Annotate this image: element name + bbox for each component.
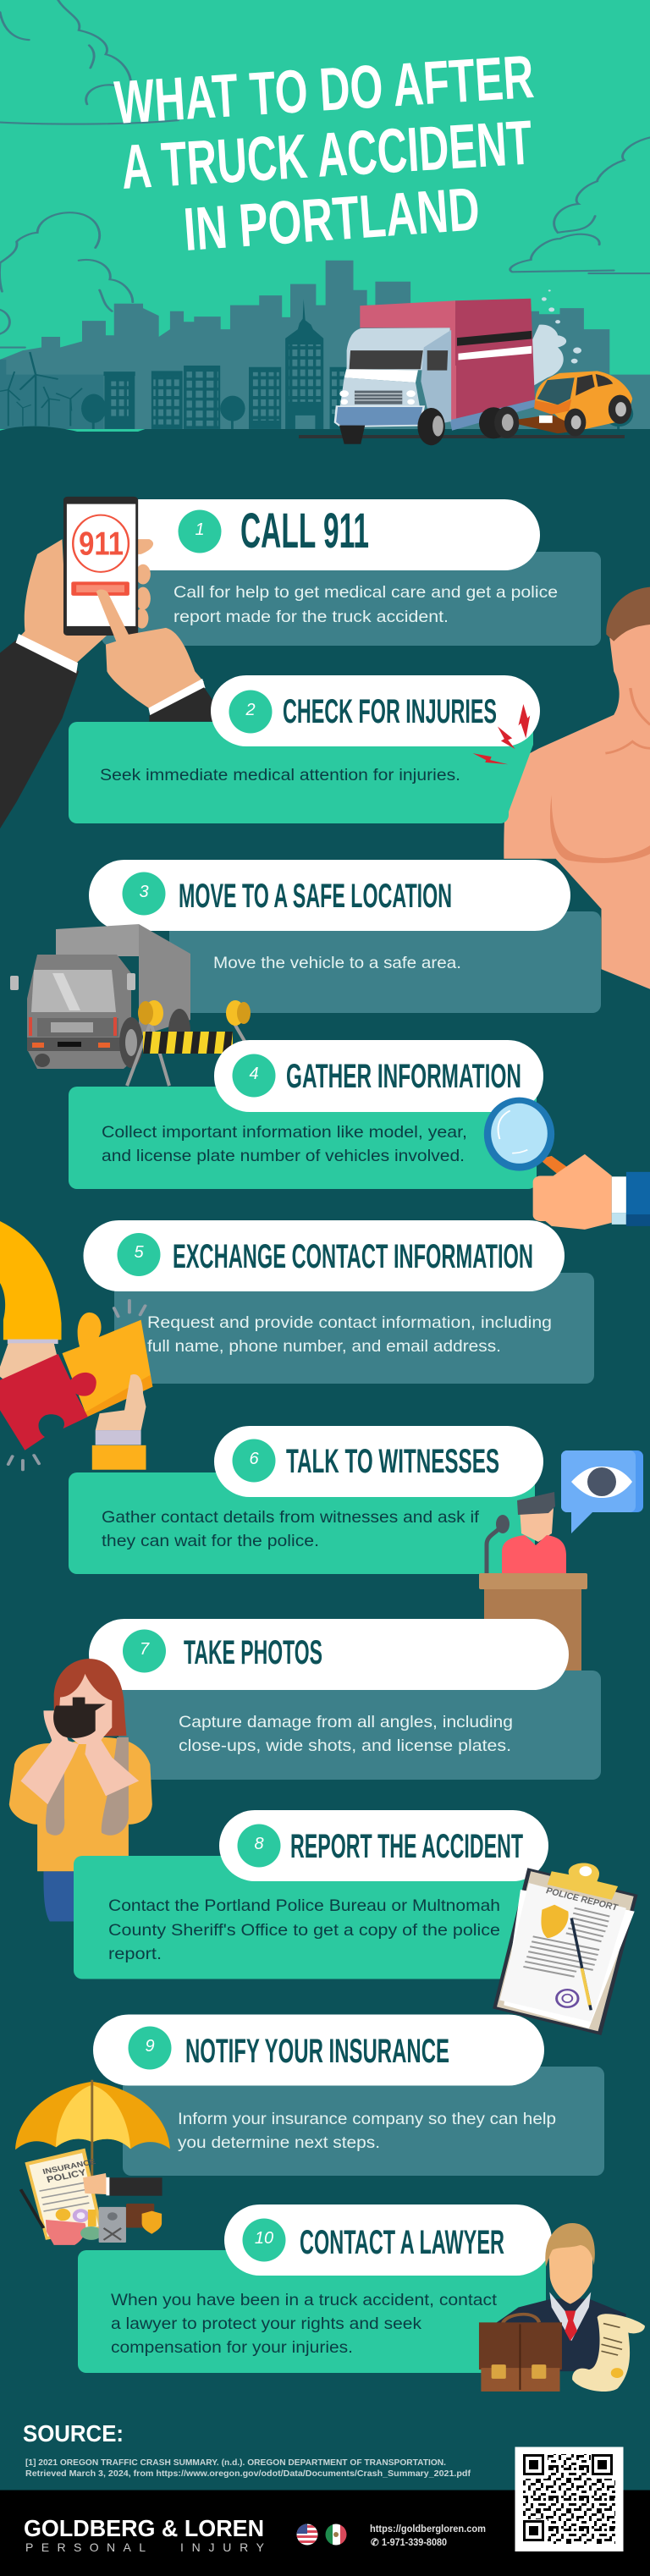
panel text box: [169, 911, 601, 1013]
icon: pain bolts: [473, 704, 530, 764]
umbrella: [15, 2082, 170, 2149]
logo: INJURY: [180, 2540, 265, 2554]
heading: NOTIFY YOUR INSURANCE: [185, 2033, 449, 2070]
icon: photographer: [9, 1659, 152, 1922]
bumper: [335, 406, 424, 427]
panel text box: [114, 1273, 594, 1384]
heading: TAKE PHOTOS: [184, 1634, 322, 1671]
heading: CONTACT A LAWYER: [300, 2224, 504, 2261]
heading: MOVE TO A SAFE LOCATION: [179, 878, 452, 915]
step 3: move to a safe location: [89, 860, 601, 1013]
step 1: call 911: [93, 499, 601, 646]
safe: [99, 2207, 126, 2243]
number badge: 1: [195, 520, 205, 539]
chassis: [450, 399, 538, 431]
body text: report made for the truck accident.: [174, 608, 449, 626]
logo: PERSONAL: [25, 2540, 146, 2554]
step 6: talk to witnesses: [69, 1426, 543, 1574]
icon: magnifying glass in hand: [484, 1098, 650, 1230]
briefcase: [126, 2204, 154, 2228]
number badge: 9: [145, 2037, 155, 2056]
number badge: 8: [254, 1835, 264, 1853]
citation: [1] 2021 OREGON TRAFFIC CRASH SUMMARY. (n.d.). OREGON DEPARTMENT OF TRANSPORTATION.: [25, 2458, 446, 2468]
headlights: [339, 390, 416, 405]
icon: witness at podium: [479, 1492, 587, 1671]
number badge: [229, 691, 273, 733]
heading pill: [93, 499, 540, 570]
icon: police report clipboard: [493, 1863, 638, 2035]
footer bar: [0, 2490, 650, 2576]
heading pill: [89, 860, 570, 931]
step 5: exchange contact information: [83, 1220, 594, 1384]
head: [548, 2238, 593, 2304]
contact details: [370, 2524, 486, 2548]
panel text box: [69, 1472, 535, 1574]
panel text box: [102, 552, 601, 646]
heading: CALL 911: [240, 504, 369, 559]
heading pill: [214, 1426, 543, 1497]
heading: CHECK FOR INJURIES: [283, 693, 497, 730]
number badge: [122, 872, 166, 916]
contact details: 1-971-339-8080: [382, 2538, 447, 2548]
city skyline back: [0, 261, 650, 474]
body text: Inform your insurance company so they can help: [178, 2110, 556, 2128]
front grille: [355, 391, 402, 405]
podium: [484, 1588, 581, 1671]
step 9: notify your insurance: [93, 2014, 604, 2176]
step 5: exchange contact information: full name, phone number, and email address.: [147, 1337, 501, 1356]
heading pill: [211, 675, 540, 746]
illustration: man with injured shoulder: [504, 587, 650, 989]
number badge: 6: [249, 1450, 259, 1468]
number badge: 3: [139, 883, 149, 901]
arms: [20, 1710, 79, 1804]
icon: hands holding phone dialing 911: 911: [79, 526, 124, 563]
number badge: 10: [255, 2229, 273, 2248]
icon: insurance umbrella and policy: INSURANCE: [41, 2158, 97, 2177]
piggy bank: [46, 2220, 85, 2245]
barrier stripes: [143, 1032, 233, 1054]
box front: [360, 300, 455, 421]
truck cab: [27, 955, 131, 1069]
source heading: SOURCE:: [23, 2420, 124, 2447]
number badge: 2: [245, 701, 256, 719]
number badge: 7: [140, 1640, 150, 1659]
icon: police report clipboard: POLICE REPORT: [544, 1885, 620, 1913]
truck box: [56, 924, 139, 956]
step 8: report the accident: [74, 1810, 548, 1979]
panel: header scene: [0, 0, 650, 474]
icon: speech bubble with eye: [561, 1450, 643, 1533]
footer: [0, 2447, 650, 2576]
icon: US flag: [296, 2524, 318, 2546]
number badge: [178, 509, 222, 553]
body text: Request and provide contact information, including: [147, 1313, 552, 1332]
number badge: [129, 2026, 171, 2070]
camera: [53, 1698, 106, 1738]
jeans: [43, 1871, 91, 1922]
icon: gray truck and barrier: [10, 924, 251, 1086]
number badge: [117, 1233, 161, 1276]
cab: [347, 328, 450, 370]
number badge: [123, 1630, 166, 1672]
hand and sleeve: [83, 2173, 108, 2194]
heading: TALK TO WITNESSES: [286, 1443, 499, 1480]
step 4: gather information: and license plate number of vehicles involved.: [102, 1147, 465, 1165]
number badge: [242, 2219, 286, 2261]
suit: [489, 2299, 626, 2371]
illustration: truck crash: [335, 289, 632, 445]
icon: hands holding phone dialing 911: [0, 497, 213, 828]
logo: [24, 2515, 265, 2554]
trees: [81, 394, 106, 423]
step 9: notify your insurance: you determine next steps.: [178, 2133, 380, 2152]
step 2: check for injuries: [69, 675, 540, 823]
heading pill: [214, 1040, 543, 1112]
front buildings: [104, 375, 135, 429]
contact details: ✆: [371, 2537, 379, 2548]
box side: [455, 299, 535, 421]
number badge: [232, 1439, 276, 1483]
body text: Gather contact details from witnesses and ask if: [102, 1508, 480, 1527]
panel text box: [69, 1087, 537, 1189]
heading pill: [83, 1220, 565, 1291]
body text: Capture damage from all angles, including: [179, 1713, 513, 1731]
heading pill: [93, 2014, 544, 2085]
heading pill: [89, 1619, 569, 1690]
policy document: [25, 2149, 103, 2240]
icon: Mexico flag: [325, 2524, 347, 2546]
step 6: talk to witnesses: they can wait for the police.: [102, 1532, 319, 1550]
briefcase: [503, 2315, 539, 2324]
clouds: [0, 0, 650, 348]
wind turbines: [0, 352, 82, 426]
right hand: [96, 590, 204, 709]
sweater: [9, 1737, 152, 1871]
panel text box: [118, 1671, 601, 1780]
ground: [0, 427, 650, 474]
number badge: [232, 1054, 276, 1097]
step 8: report the accident: report.: [108, 1945, 162, 1963]
step 10: contact a lawyer: [78, 2204, 552, 2373]
body text: When you have been in a truck accident, contact: [111, 2291, 498, 2309]
left sleeve: [0, 640, 79, 828]
pen: [20, 2189, 43, 2228]
body text: Call for help to get medical care and get a police: [174, 583, 558, 602]
front wheels: [339, 426, 365, 444]
left hand: [19, 539, 107, 664]
body text: Seek immediate medical attention for injuries.: [100, 766, 460, 784]
number badge: 4: [249, 1065, 259, 1083]
step 7: take photos: close-ups, wide shots, and license plates.: [179, 1737, 511, 1755]
contact details: https://goldbergloren.com: [370, 2524, 486, 2535]
icon: lawyer with briefcase and scroll: [479, 2223, 645, 2392]
icon: insurance umbrella and policy: [15, 2080, 170, 2245]
smoke: [532, 325, 566, 387]
panel text box: [69, 722, 509, 823]
logo: GOLDBERG & LOREN: [24, 2515, 264, 2541]
hair: [54, 1659, 126, 1737]
phone: [63, 497, 138, 636]
number badge: 5: [134, 1243, 144, 1262]
car: [535, 371, 632, 432]
coins: [56, 2209, 70, 2221]
body text: Contact the Portland Police Bureau or Multnomah: [108, 1896, 500, 1915]
panel text box: [78, 2250, 546, 2373]
body text: Move the vehicle to a safe area.: [213, 954, 461, 972]
rear wheel: [479, 407, 508, 438]
step 10: contact a lawyer: compensation for your injuries.: [111, 2338, 353, 2357]
body text: [174, 583, 558, 626]
sky: [0, 0, 650, 432]
shield: [142, 2211, 162, 2234]
panel text box: [74, 1856, 535, 1979]
QR code: [515, 2447, 623, 2551]
barrier legs: [127, 1022, 245, 1086]
microphone: [487, 1528, 499, 1574]
step 8: report the accident: County Sheriff's Office to get a copy of the police: [108, 1921, 500, 1940]
heading pill: [224, 2204, 552, 2276]
step 4: gather information: [69, 1040, 650, 1230]
scroll: [572, 2314, 645, 2392]
person: [520, 1508, 554, 1542]
number badge: [237, 1825, 281, 1867]
road line: [299, 435, 625, 438]
panel text box: [123, 2067, 604, 2176]
icon: insurance umbrella and policy: POLICY: [46, 2167, 87, 2185]
step 10: contact a lawyer: a lawyer to protect your rights and seek: [111, 2315, 421, 2333]
citation: [25, 2458, 471, 2479]
source section: [23, 2420, 471, 2479]
barrier lamps: [138, 1000, 251, 1026]
step 7: take photos: [89, 1619, 601, 1780]
face: [58, 1674, 112, 1744]
body text: Collect important information like model, year,: [102, 1123, 467, 1142]
heading pill: [219, 1810, 548, 1881]
title: [113, 43, 536, 264]
icon: hands joining puzzle pieces: [0, 1221, 152, 1470]
title: IN PORTLAND: [181, 175, 482, 264]
straps: [46, 1737, 129, 1836]
citation: Retrieved March 3, 2024, from https://www.oregon.gov/odot/Data/Documents/Crash_Summary_2021.pdf: [25, 2469, 471, 2479]
